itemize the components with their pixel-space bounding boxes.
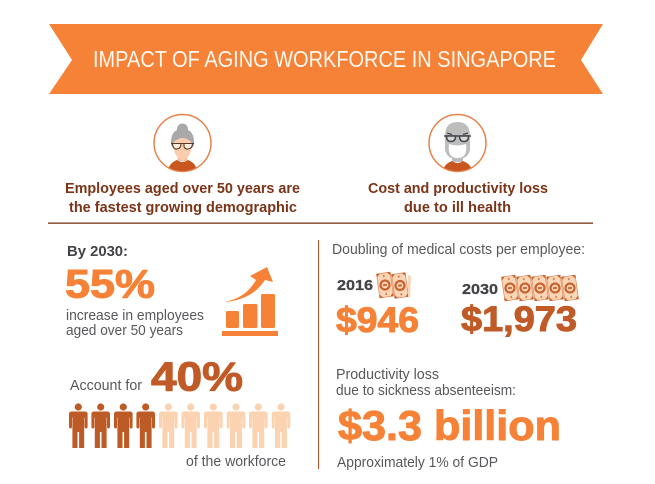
icon: rising bar chart with arrow xyxy=(222,267,278,336)
heading: cost and productivity loss: Cost and productivity loss xyxy=(368,181,548,197)
text: doubling of medical costs: Doubling of medical costs per employee: xyxy=(332,241,585,258)
icon: older woman with glasses xyxy=(154,114,211,172)
stat: 40 percent: 40% xyxy=(151,354,243,400)
text: of the workforce: of the workforce xyxy=(186,454,286,470)
text: productivity loss: Productivity loss xyxy=(336,367,439,383)
heading: fastest growing demographic xyxy=(65,181,300,216)
text: account for: Account for xyxy=(70,378,142,394)
icon: older man with face mask xyxy=(429,114,486,172)
label: 2016: 2016 xyxy=(337,277,373,294)
label: 2030: 2030 xyxy=(462,281,498,298)
stat: 55 percent: 55% xyxy=(65,262,155,306)
title banner xyxy=(49,24,603,94)
text: productivity loss: due to sickness absenteeism: xyxy=(336,383,516,399)
stat: 1973 dollars: $1,973 xyxy=(461,300,577,339)
stat: 946 dollars: $946 xyxy=(336,301,419,340)
pictogram: 4 of 10 workers xyxy=(69,403,290,448)
heading: cost and productivity loss: due to ill health xyxy=(404,200,511,216)
text: by 2030: By 2030: xyxy=(67,244,128,260)
icon: banknotes 2016 xyxy=(376,272,411,298)
title banner: IMPACT OF AGING WORKFORCE IN SINGAPORE xyxy=(93,46,556,72)
text: increase in employees: aged over 50 years xyxy=(66,323,183,339)
text: increase in employees xyxy=(66,308,204,339)
heading: fastest growing demographic: the fastest growing demographic xyxy=(69,200,297,216)
heading: cost and productivity loss xyxy=(368,181,548,216)
icon: banknotes 2030 xyxy=(501,275,579,301)
text: increase in employees: increase in employees xyxy=(66,308,204,324)
text: approximately 1 percent of GDP: Approximately 1% of GDP xyxy=(337,455,498,471)
heading: fastest growing demographic: Employees aged over 50 years are xyxy=(65,181,300,197)
stat: 3.3 billion: $3.3 billion xyxy=(338,402,561,449)
text: productivity loss xyxy=(336,367,516,399)
